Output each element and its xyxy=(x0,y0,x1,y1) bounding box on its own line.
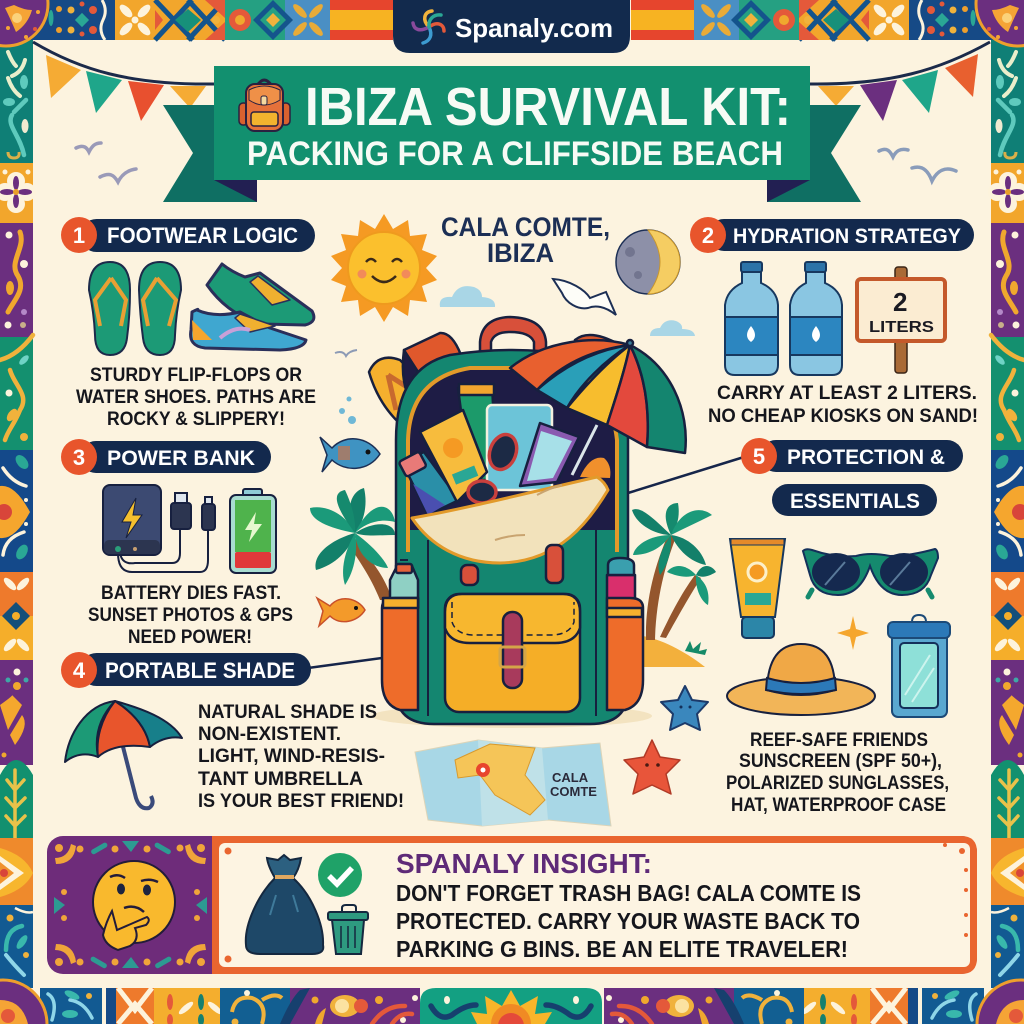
icon: sunscreen tube xyxy=(730,539,785,638)
icon: orange backpack xyxy=(239,80,290,131)
top-left medallion xyxy=(0,0,48,46)
section heading 4: 4 xyxy=(73,658,86,683)
power bank text: NEED POWER! xyxy=(128,627,252,648)
title line 2: PACKING FOR A CLIFFSIDE BEACH xyxy=(247,135,783,173)
title banner xyxy=(163,66,861,202)
section heading 3: POWER BANK xyxy=(107,447,255,470)
top-right medallion xyxy=(976,0,1024,46)
icon: small birds and bubbles xyxy=(335,350,357,424)
back strap xyxy=(404,333,461,378)
purple tile pattern xyxy=(55,844,206,966)
title line 1: IBIZA SURVIVAL KIT: xyxy=(305,77,791,137)
insight heading: SPANALY INSIGHT: xyxy=(396,848,652,879)
icon: blue starfish xyxy=(661,686,708,730)
opening xyxy=(408,368,617,530)
power bank text xyxy=(88,583,293,648)
footwear text: STURDY FLIP-FLOPS OR xyxy=(90,365,302,386)
icon: 2 liters sign xyxy=(857,267,945,373)
location label: IBIZA xyxy=(487,238,554,268)
inner body seams xyxy=(400,530,620,716)
icon: map: COMTE xyxy=(550,784,597,799)
panel: power bank xyxy=(61,439,293,648)
orange item xyxy=(580,458,610,478)
icon: clouds xyxy=(440,286,695,336)
section heading 2 xyxy=(690,217,974,253)
essentials text: SUNSCREEN (SPF 50+), xyxy=(739,751,942,772)
decorative border: right tiles xyxy=(988,40,1024,988)
essentials text: REEF-SAFE FRIENDS xyxy=(750,730,928,751)
insight body: PARKING G BINS. BE AN ELITE TRAVELER! xyxy=(396,936,848,962)
icon: umbrella xyxy=(65,701,182,808)
sunscreen xyxy=(420,410,487,502)
shade text: IS YOUR BEST FRIEND! xyxy=(198,791,404,812)
logo mark xyxy=(413,11,444,43)
ground shadow xyxy=(372,704,652,728)
icon: map xyxy=(415,740,611,826)
decorative border: left tiles xyxy=(0,40,36,988)
strap tabs xyxy=(546,545,563,583)
power stick xyxy=(402,452,459,515)
icon: water bottles xyxy=(725,262,842,375)
section heading 1 xyxy=(61,217,315,253)
section heading 5: ESSENTIALS xyxy=(790,490,920,513)
shade text: NON-EXISTENT. xyxy=(198,724,341,745)
flip-flop behind pack xyxy=(369,358,418,432)
shade text: NATURAL SHADE IS xyxy=(198,702,377,723)
icon: red starfish xyxy=(624,740,680,794)
birds right xyxy=(879,149,956,181)
icon: seagull xyxy=(553,279,616,315)
decorative border: top tiles right xyxy=(631,0,1024,40)
section heading 4: PORTABLE SHADE xyxy=(105,658,295,683)
shade text: TANT UMBRELLA xyxy=(198,769,363,790)
icon: phone battery xyxy=(230,489,276,573)
panel: footwear logic xyxy=(61,217,316,430)
bunting left xyxy=(33,42,214,121)
side pockets xyxy=(390,566,418,608)
logo tab: Spanaly.com xyxy=(455,13,613,43)
decorative border: top tiles left xyxy=(0,0,393,40)
section heading 5: PROTECTION & xyxy=(787,446,945,469)
icon: flip-flops xyxy=(89,262,181,355)
bottom-right medallion xyxy=(977,980,1024,1024)
birds left xyxy=(76,143,136,182)
leader lines xyxy=(308,457,744,668)
front pocket xyxy=(445,594,580,712)
essentials text: HAT, WATERPROOF CASE xyxy=(731,795,946,816)
backpack xyxy=(369,317,686,728)
red sunglasses xyxy=(468,431,521,503)
section heading 2: 2 xyxy=(702,223,714,248)
sand island xyxy=(640,636,705,667)
power bank text: SUNSET PHOTOS & GPS xyxy=(88,605,293,626)
section heading 1: 1 xyxy=(73,223,85,248)
section heading 2: HYDRATION STRATEGY xyxy=(733,225,961,248)
section heading 5: 5 xyxy=(753,444,765,469)
umbrella in pack xyxy=(510,340,686,453)
icon: thinking face xyxy=(93,861,175,950)
icon: 2 liters sign: LITERS xyxy=(869,319,934,336)
panel: hydration strategy xyxy=(690,217,978,427)
main body xyxy=(396,350,628,724)
ribbon tails xyxy=(163,105,861,202)
footwear text: WATER SHOES. PATHS ARE xyxy=(76,387,316,408)
bottom-left medallion xyxy=(0,980,47,1024)
decorative border: bottom tiles left xyxy=(40,988,420,1024)
section heading 3 xyxy=(61,439,271,475)
logo tab xyxy=(393,0,630,53)
panel: Spanaly insight xyxy=(47,836,977,974)
icon: smiling sun xyxy=(331,214,437,322)
bunting right xyxy=(810,42,990,121)
panel: protection and essentials xyxy=(726,438,963,816)
decorative border: bottom tiles right xyxy=(604,988,984,1024)
icon: waterproof case xyxy=(888,615,950,717)
icon: blue fish xyxy=(320,437,380,472)
section heading 5 xyxy=(741,438,963,516)
panel: portable shade xyxy=(61,652,404,812)
section heading 3: 3 xyxy=(73,445,85,470)
phone xyxy=(520,423,579,486)
icon: left palm tree xyxy=(310,488,395,600)
essentials text xyxy=(726,730,949,816)
icon: water shoes xyxy=(191,264,314,350)
power bank text: BATTERY DIES FAST. xyxy=(101,583,281,604)
icon: moon xyxy=(616,230,680,294)
icon: sparkle xyxy=(837,616,869,650)
umbrella shaft xyxy=(572,425,597,475)
insight body: DON'T FORGET TRASH BAG! CALA COMTE IS xyxy=(396,880,861,906)
location label: CALA COMTE, xyxy=(441,212,610,242)
icon: map: CALA xyxy=(552,770,589,785)
icon: sun hat xyxy=(727,644,875,715)
pocket strap xyxy=(503,612,522,688)
icon: orange fish xyxy=(317,598,365,626)
icon: green check xyxy=(318,853,362,897)
section heading 4 xyxy=(61,652,311,688)
footwear text: ROCKY & SLIPPERY! xyxy=(107,409,285,430)
hydration text xyxy=(708,383,978,427)
icon: 2 liters sign: 2 xyxy=(893,287,907,317)
handle xyxy=(480,317,546,352)
icon: right palm trees xyxy=(632,503,716,655)
footwear text xyxy=(76,365,316,430)
hydration text: CARRY AT LEAST 2 LITERS. xyxy=(717,383,977,404)
hydration text: NO CHEAP KIOSKS ON SAND! xyxy=(708,406,978,427)
insight body: PROTECTED. CARRY YOUR WASTE BACK TO xyxy=(396,908,860,934)
insight body xyxy=(396,880,861,962)
icon: trash bag xyxy=(246,855,323,954)
location label xyxy=(441,212,610,268)
icon: sunglasses xyxy=(803,549,938,597)
shade text xyxy=(198,702,404,812)
section heading 1: FOOTWEAR LOGIC xyxy=(107,223,298,248)
tablet xyxy=(487,405,552,490)
shade text: LIGHT, WIND-RESIS- xyxy=(198,746,385,767)
icon: power bank and cable xyxy=(103,485,215,572)
decorative border: bottom center sunburst xyxy=(420,988,602,1024)
icon: trash can xyxy=(328,905,368,954)
canvas flap xyxy=(412,477,608,563)
green tube xyxy=(458,385,497,480)
essentials text: POLARIZED SUNGLASSES, xyxy=(726,773,949,794)
corner dots xyxy=(224,843,968,962)
